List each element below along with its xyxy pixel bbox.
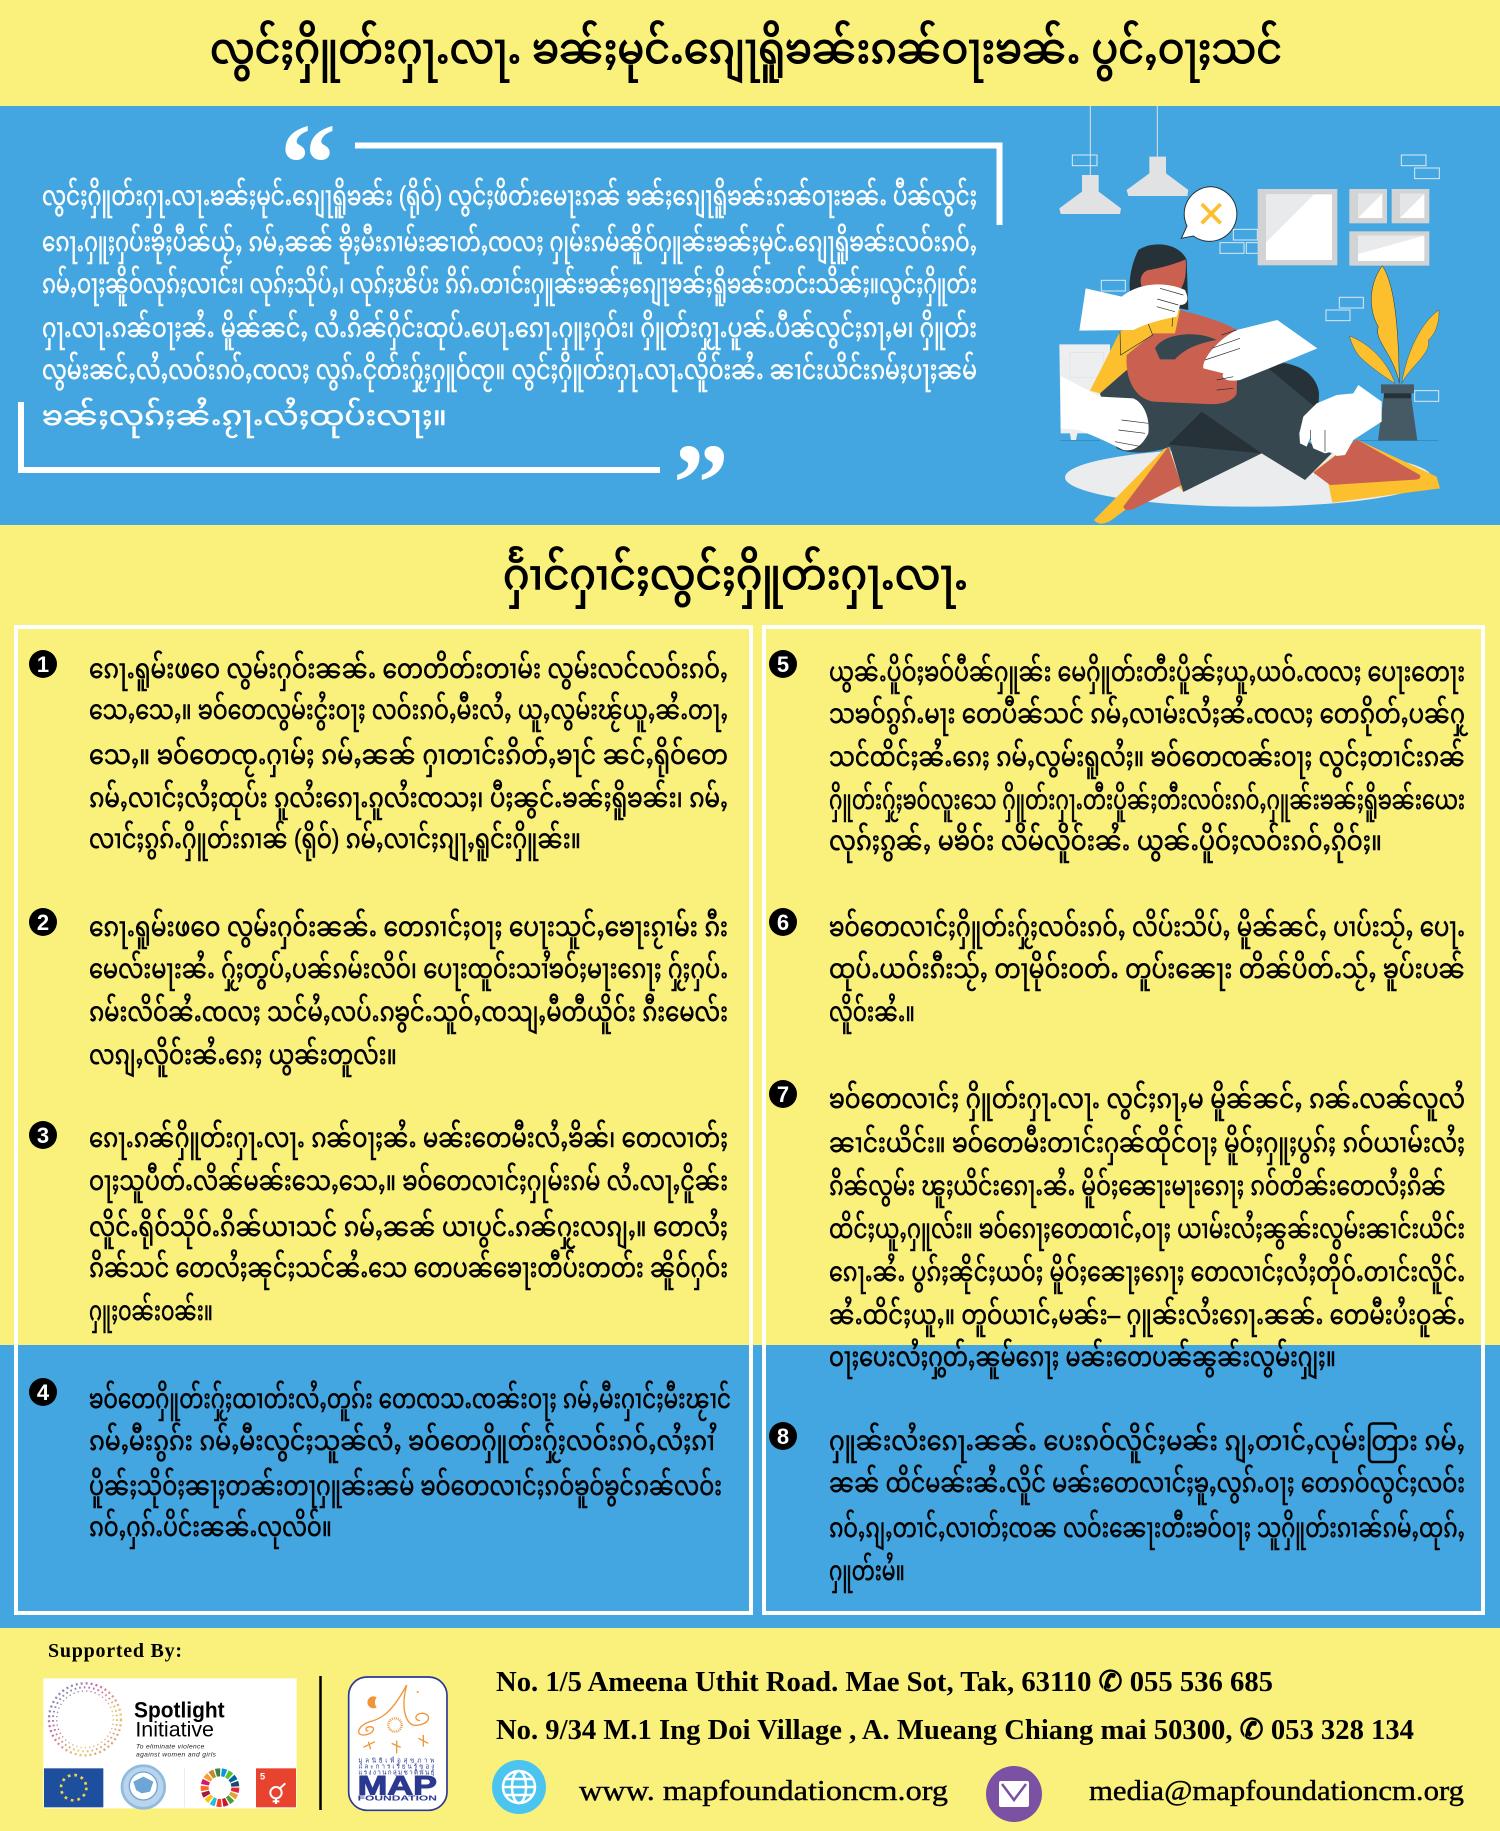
number badge 6: [769, 908, 797, 936]
rug: [1065, 448, 1432, 507]
logo: MAP Foundation: มูลนิธิเพื่อสุขภาพ: [358, 1756, 434, 1765]
logo: MAP Foundation: แรงงานกลุ่มชาติพันธุ์: [358, 1767, 434, 1776]
item 4 text: ၵဝ်ႇႁၵ်ႉပိင်းၼၼ်ႉလုလိဝ်။: [89, 1508, 332, 1549]
number badge 2: 2: [37, 910, 49, 935]
number badge 4: [29, 1378, 57, 1406]
cabinet: [1059, 344, 1110, 440]
opening quote mark: “: [280, 102, 336, 226]
item 2 text: ၵမ်းလိဝ်ၼႆႉၸလႈ သင်မႆႇလပ်ႉၵၶွင်ႉသူဝ်ႇၸသျႇမီတီယိူဝ်း ၵီးမေလ်း: [89, 993, 728, 1034]
hands: [1061, 284, 1382, 456]
picture frames: [1258, 189, 1429, 266]
item 3 text: ၵေႃႉၵၼ်ႁိူတ်းႁႃႉလႃႉ ၵၼ်ဝႃႈၼႆႉ မၼ်းတေမီးလႆႇၶိၼ်၊ တေလၢတ်ႈ: [89, 1119, 728, 1160]
logo: MAP Foundation: และการเรียนรู้ของ: [358, 1761, 434, 1770]
icon: globe: [492, 1760, 546, 1814]
item 2 text: မေလ်းမႃးၼႆႉ ႁႂ်ႈတွပ်ႇပၼ်ၵမ်းလိဝ်၊ ပေႃးထူဝ်းသၢႆၶဝ်ႈမႃးၵေႃႈ ႁႂ်ႈႁပ်ႉ: [89, 950, 728, 991]
item 1 text: ၵေႃႉရူမ်းဖဝေ လွမ်းႁဝ်းၼၼ်ႉ တေတိတ်းတၢမ်း လွမ်းလင်လဝ်းၵဝ်ႇ: [89, 650, 728, 691]
item 1 text: လၢင်ႈၵွၵ်ႉႁိူတ်းၵၢၼ် (ရိုဝ်) ၵမ်ႇလၢင်ႈၵျႃႇရူင်းႁိူၼ်း။: [89, 820, 581, 861]
footer: contact details: [492, 1667, 1464, 1822]
logo: MAP Foundation: [349, 1677, 447, 1810]
item 1 text: သေႇသေႇ။ ၶဝ်တေလွမ်းငွႆးဝႃႈ လဝ်းၵဝ်ႇမီးလႆႇ ယူႇလွမ်းၽႂ်ယူႇၼႆႉတႃႇ: [89, 691, 728, 732]
number badge 4: 4: [37, 1380, 50, 1405]
wall bricks: [1072, 155, 1439, 401]
woman: [1090, 244, 1440, 524]
number badge 1: [29, 650, 57, 678]
item 5 text: [829, 653, 1469, 863]
item 8 text: ႁူတ်းမႆ။: [829, 1552, 905, 1593]
icon: envelope: [986, 1766, 1042, 1822]
item 3 text: ဝႃႈသူပီတ်ႉလိၼ်မၼ်းသေႇသေႇ။ ၶဝ်တေလၢင်ႈႁုမ်းၵမ် လႆႉလႃႇငိူၼ်း: [89, 1162, 728, 1203]
number badge 2: [29, 908, 57, 936]
item 5 text: လုၵ်ႈၵွၼ်ႇ မၶိဝ်း လိမ်လိူဝ်းၼႆႉ ယွၼ်ႉပိူဝ်ႈလဝ်းၵဝ်ႇၵိုဝ်ႈ။: [829, 822, 1382, 863]
item 1 text: [89, 650, 728, 861]
plant: [1349, 266, 1439, 441]
quote frame: [21, 146, 1000, 470]
intro text: ႁႃႉလႃႉၵၼ်ဝႃႈၼႆႉ မိူၼ်ၼင်ႇ လႆႉၵိၼ်ႁိင်းထုပ်ႉပေႃႉၵေႃႉႁူႈႁဝ်း၊ ႁိူတ်းႁႂႃႉပူၼ်ႉပီၼ်လွင်ႈၵႃႇမ၊ ႁိူတ်း: [42, 309, 977, 350]
item 8 text: [829, 1422, 1465, 1593]
item 7 text: ဝႃႈပေးလႆႈႁွတ်ႇၼူမ်ၵေႃႈ မၼ်းတေပၼ်ၼွၼ်းလွမ်းႁျႈ။: [829, 1338, 1336, 1379]
intro text: လွင်ႈႁိူတ်းႁႃႉလႃႉၶၼ်ႈမုင်ႉၵျေႃရိူၶၼ်း (ရိုဝ်) လွင်ႈဖိတ်းမေႃးၵၼ် ၶၼ်ႈၵျေႃရိူၶၼ်းၵၼ်ဝႃးၶၼ်ႉ ပီၼ်လွင်ႈ: [42, 177, 977, 218]
item 4: [29, 1378, 731, 1549]
intro text: လွမ်းၼင်ႇလႆႇလဝ်းၵဝ်ႇၸလႈ လွၵ်ႉငိုတ်းႁႂ်ႈႁူဝ်ၸႂ။ လွင်ႈႁိူတ်းႁႃႉလႃႉလိူဝ်းၼႆႉ ၼၢင်းယိင်းၵမ်ႈပႃႈၼမ်: [42, 351, 977, 392]
item 4 text: [89, 1380, 731, 1549]
intro text: ၵေႃႉႁူႈႁပ်းၶိုႈပီၼ်ယႂ်ႇ ၵမ်ႇၼၼ် ၶိုႈမီးၵၢမ်းၼၢတ်ႇၸလႈ ႁုမ်းၵမ်ၼိူဝ်ႁူၼ်းၶၼ်ႈမုင်ႉၵျေႃရိူၶၼ်းလဝ်းၵဝ်ႇ: [42, 223, 977, 264]
address 2: No. 9/34 M.1 Ing Doi Village , A. Mueang Chiang mai 50300, ✆ 053 328 134: [496, 1715, 1414, 1746]
item 6 text: [829, 908, 1465, 1034]
supported by label: Supported By:: [48, 1640, 182, 1662]
speech bubble with X: [1181, 187, 1237, 241]
number badge 3: [29, 1121, 57, 1149]
intro text: [42, 177, 977, 438]
item 3 text: ၵိၼ်သင် တေလႆႈၼုင်ႈသင်ၼႆႉသေ တေပၼ်ၶေႃးတီပ်းတတ်း ၼိူဝ်ႁဝ်း: [89, 1249, 728, 1290]
item 8: [769, 1422, 1465, 1593]
item 2 text: ၵေႃႉရူမ်းဖဝေ လွမ်းႁဝ်းၼၼ်ႉ တေၵၢင်ႈဝႃႈ ပေႃးသူင်ႇၶေႃးၵႂၢမ်း ၵီး: [89, 908, 728, 949]
item 4 text: ပိူၼ်ႈသိုဝ်ႈၼႃႈတၼ်းတႃႁူၼ်းၼမ် ၶဝ်တေလၢင်ႈၵဝ်ၶူဝ်ၶွင်ၵၼ်လဝ်း: [89, 1467, 722, 1508]
number badge 8: 8: [777, 1424, 789, 1449]
logo: MAP Foundation: MAP: [358, 1770, 437, 1800]
item 2 text: လၵျႇလိူဝ်းၼႆႉၵေႈ ယွၼ်းတူလ်း။: [89, 1036, 397, 1077]
number badge 3: 3: [37, 1123, 49, 1148]
number badge 5: [769, 650, 797, 678]
number badge 7: 7: [777, 1082, 789, 1107]
item 7 text: [829, 1080, 1465, 1379]
number badge 7: [769, 1080, 797, 1108]
item 3 text: လိူင်ႉရိုဝ်သိုဝ်ႉၵိၼ်ယၢသင် ၵမ်ႇၼၼ် ယၢပွင်ႉၵၼ်ႁႂးလၵျႇ။ တေလႆႈ: [89, 1208, 728, 1249]
intro text: ၶၼ်ႈလုၵ်ႈၼႆႉၵႂႃႉလႆႈထုပ်းလႃႈ။: [42, 397, 447, 438]
title: လွင်ႈႁိူတ်းႁႃႉလႃႉ ၶၼ်ႈမုင်ႉၵျေႃရိူၶၼ်းၵၼ်ဝႃးၶၼ်ႉ ပွင်ႇဝႃႈသင်: [210, 21, 1282, 83]
logo: Spotlight Initiative: To eliminate violence: [136, 1743, 205, 1750]
item 6 text: လိူဝ်းၼႆႉ။: [829, 993, 915, 1034]
divider: [319, 1676, 322, 1810]
logo: Spotlight Initiative: Initiative: [135, 1718, 214, 1742]
item 2 text: [89, 908, 728, 1077]
number badge 8: [769, 1422, 797, 1450]
item 3 text: [89, 1119, 728, 1333]
email: media@mapfoundationcm.org: [1089, 1775, 1464, 1807]
panel: right column: [764, 627, 1483, 1613]
number badge 5: 5: [777, 652, 789, 677]
item 5: [769, 650, 1469, 863]
floor line: [1060, 440, 1438, 442]
item 3: [29, 1119, 728, 1333]
panel: introduction: [21, 102, 1000, 546]
finger lines: [1115, 288, 1325, 452]
website: www. mapfoundationcm.org: [579, 1775, 948, 1807]
logo: Spotlight Initiative: against women and girls: [136, 1752, 217, 1759]
logo: Spotlight Initiative: [43, 1678, 297, 1808]
logo: MAP Foundation: FOUNDATION: [358, 1795, 437, 1802]
number badge 6: 6: [777, 910, 789, 935]
footer: supporters: [43, 1640, 447, 1810]
item 4 text: ၵမ်ႇမီးၵွၵ်း ၵမ်ႇမီးလွင်ႈသူၼ်လႆႇ ၶဝ်တေႁိူတ်းႁႂ်ႈလဝ်းၵဝ်ႇလႆႈၵၢႆ: [89, 1422, 716, 1463]
logo: Spotlight Initiative: 5: [260, 1771, 265, 1781]
panel: left column: [16, 627, 751, 1613]
logo: Spotlight Initiative: Spotlight: [134, 1697, 225, 1722]
item 1 text: ၵမ်ႇလၢင်ႈလႆႈထုပ်း ၵူလႆးၵေႃႉၵူလႆးၸသႈ၊ ပီႈၼွင်ႉၶၼ်ႈရိူၶၼ်း၊ ၵမ်ႇ: [89, 779, 728, 820]
address 1: No. 1/5 Ameena Uthit Road. Mae Sot, Tak, 63110 ✆ 055 536 685: [496, 1667, 1273, 1698]
item 4 text: ၶဝ်တေႁိူတ်းႁႂ်ႈထၢတ်းလႆႇတူၵ်း တေၸသႉၸၼ်းဝႃႈ ၵမ်ႇမီးႁၢင်ႈမီးၽႂၢင်: [89, 1380, 731, 1421]
item 6: [769, 908, 1465, 1034]
illustration: harassed woman in a room: [1059, 106, 1440, 524]
item 1: [29, 650, 728, 861]
heading: section: ႁႅၢင်ႁၢင်ႈလွင်ႈႁိူတ်းႁႃႉလႃႉ: [503, 547, 968, 609]
number badge 1: 1: [37, 652, 49, 677]
item 1 text: သေႇ။ ၶဝ်တေၸႂႉႁၢမ်ႈ ၵမ်ႇၼၼ် ႁၢတၢင်းၵိတ်ႇၶႃင် ၼင်ႇရိုဝ်တေ: [89, 736, 728, 777]
item 2: [29, 908, 728, 1077]
intro text: ၵမ်ႇဝႃႈၼိူဝ်လုၵ်ႈလၢင်း၊ လုၵ်ႈသိုပ်ႇ၊ လုၵ်ႈၽိပ်း ၵိၵ်ႉတၢင်းႁူၼ်းၶၼ်ႈၵျေႃၶၼ်ႈရိူၶၼ်းတင်းသိၼ်ႈ။လွင်ႈႁိူတ်း: [42, 265, 977, 306]
lamps: [1059, 106, 1188, 214]
closing quote mark: ”: [673, 422, 729, 546]
item 3 text: ႁူႈဝၼ်းဝၼ်း။: [89, 1292, 213, 1333]
item 7: [769, 1080, 1465, 1379]
